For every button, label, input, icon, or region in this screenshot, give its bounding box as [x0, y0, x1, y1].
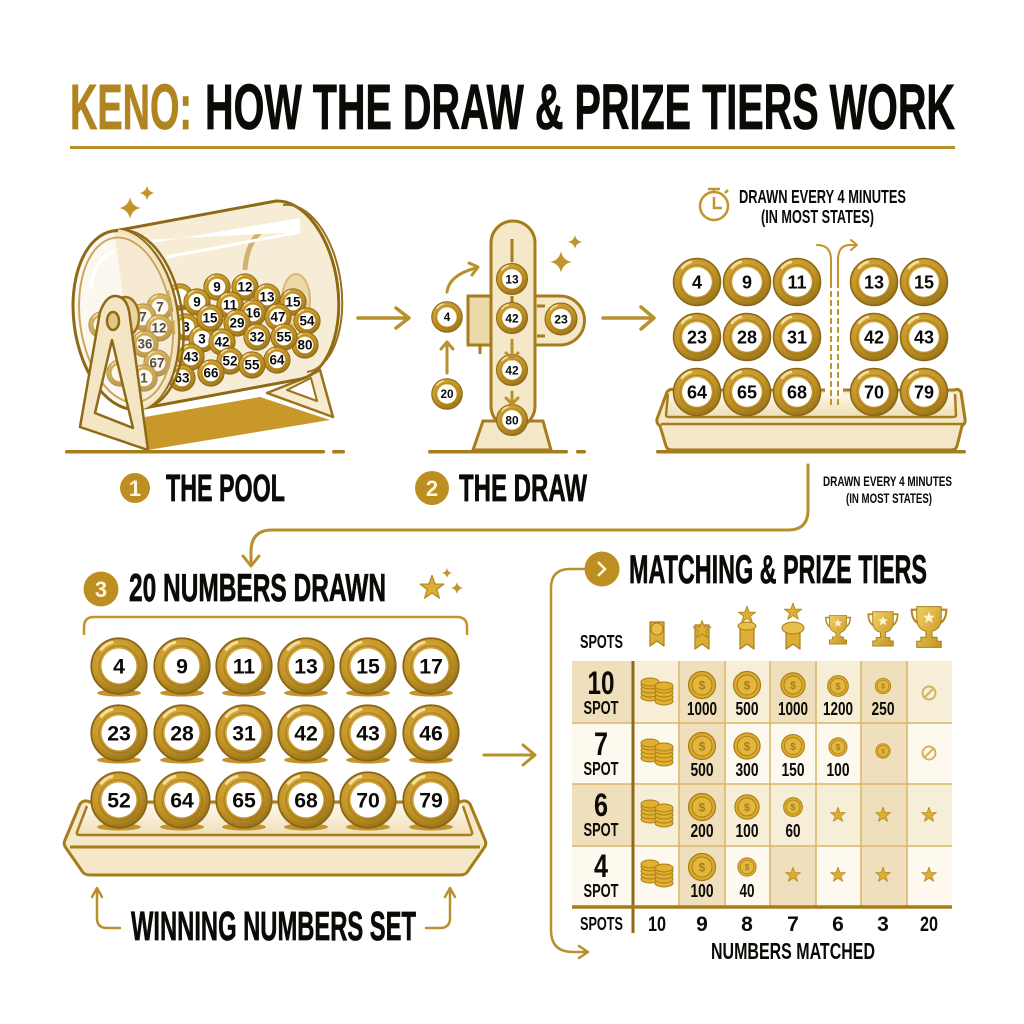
number balls: 13: [294, 655, 318, 679]
bottom axis: 20: [920, 913, 938, 936]
prize values: [687, 699, 894, 901]
winning balls: 11: [787, 272, 807, 292]
row labels: 7: [594, 726, 608, 762]
balls inside drum: 66: [204, 365, 218, 380]
tier icons: SPOTS: [580, 632, 623, 652]
tray: [64, 801, 486, 875]
balls inside drum: 64: [270, 352, 285, 367]
row labels: SPOT: [584, 698, 618, 718]
prize values: 250: [872, 699, 894, 719]
step label: the pool: THE POOL: [166, 468, 285, 510]
prize values: 100: [826, 760, 850, 780]
bottom axis: 3: [877, 913, 889, 936]
row labels: SPOT: [584, 820, 618, 840]
step label: the draw: 2: [426, 476, 438, 501]
note: draw frequency repeat: DRAWN EVERY 4 MINUTES: [823, 473, 952, 489]
ground shadow: [145, 397, 330, 450]
bottom axis: 6: [832, 913, 844, 936]
prize values: 1000: [778, 699, 808, 719]
bottom axis: 7: [787, 913, 799, 936]
arrow: connector to step 3: [243, 465, 808, 566]
number balls: 65: [232, 789, 256, 813]
right stand: [267, 370, 333, 417]
balls inside drum: 32: [250, 329, 264, 344]
winning balls: 4: [692, 272, 702, 292]
balls inside drum: 67: [150, 355, 164, 370]
number balls: 4: [113, 655, 125, 679]
step label: the pool: 1: [129, 476, 141, 501]
note: draw frequency repeat: [823, 473, 952, 506]
winning balls: 31: [787, 328, 807, 348]
coin stacks: [641, 678, 673, 887]
balls inside drum: 12: [152, 320, 166, 335]
number balls: 17: [419, 655, 443, 679]
bottom axis: 9: [696, 913, 708, 936]
heading: [84, 567, 386, 610]
balls inside drum: 63: [175, 370, 189, 385]
tier icons: [580, 603, 946, 652]
balls inside drum: 29: [230, 315, 244, 330]
balls inside drum: 43: [184, 349, 198, 364]
balls inside drum: [89, 274, 320, 391]
number balls: 70: [356, 789, 380, 813]
winning balls: 43: [914, 328, 934, 348]
step label: the draw: [415, 468, 587, 510]
winning balls: 64: [687, 382, 707, 402]
prize values: 300: [736, 760, 758, 780]
balls inside drum: 36: [138, 336, 152, 351]
bottom axis: 8: [741, 913, 753, 936]
panel: step 3 twenty numbers drawn: [64, 567, 486, 949]
no-prize marks: [922, 686, 936, 760]
number balls: 68: [294, 789, 318, 813]
balls in machine: 42: [505, 311, 519, 325]
panel: step 2 the draw: [415, 221, 587, 510]
balls inside drum: 15: [203, 310, 218, 325]
winning balls: 23: [687, 328, 707, 348]
balls in machine: 20: [440, 388, 454, 401]
arrow: numbers to prize table: [484, 745, 535, 765]
number balls: 79: [419, 789, 443, 813]
number balls: 28: [170, 722, 194, 746]
bottom axis: [580, 913, 938, 964]
prize values: 200: [690, 821, 714, 841]
ground line: [65, 450, 345, 454]
number balls: [91, 638, 459, 828]
drum front disc: [62, 224, 190, 416]
balls inside drum: 42: [215, 334, 229, 349]
note: draw frequency: [739, 186, 906, 227]
prize values: 100: [690, 881, 714, 901]
winning balls: 9: [742, 272, 752, 292]
balls inside drum: 52: [223, 353, 237, 368]
step label: the pool: [120, 468, 285, 510]
winning balls: 13: [864, 272, 884, 292]
number balls: 31: [232, 722, 256, 746]
row labels: [584, 665, 618, 901]
prize values: 40: [740, 881, 754, 901]
prize values: 60: [786, 821, 800, 841]
balls inside drum: 55: [245, 357, 260, 372]
balls inside drum: 54: [300, 313, 315, 328]
caption: WINNING NUMBERS SET: [131, 903, 416, 949]
row labels: SPOT: [584, 881, 618, 901]
row labels: 10: [588, 665, 614, 701]
row labels: 4: [594, 848, 608, 884]
icon: stars: [420, 568, 463, 598]
icon: stopwatch: [700, 189, 728, 220]
winning balls: 79: [914, 382, 934, 402]
balls in machine: 23: [554, 312, 568, 326]
balls in machine: 80: [505, 413, 519, 427]
arrow: pool to draw: [358, 308, 409, 328]
prize values: 1200: [823, 699, 853, 719]
bracket: [84, 617, 467, 635]
number balls: 15: [356, 655, 380, 679]
star marks: [786, 807, 936, 881]
balls inside drum: 80: [298, 337, 312, 352]
bottom axis: NUMBERS MATCHED: [711, 938, 875, 964]
heading: [584, 548, 927, 592]
winning balls: 70: [864, 382, 884, 402]
arrows around caption: [92, 888, 455, 928]
winning balls: 68: [787, 382, 807, 402]
bottom axis: SPOTS: [580, 914, 623, 934]
note: draw frequency repeat: (IN MOST STATES): [846, 490, 932, 506]
balls inside drum: 7: [156, 299, 164, 314]
row labels: SPOT: [584, 759, 618, 779]
winning balls: 65: [737, 382, 757, 402]
balls in machine: 4: [444, 311, 451, 324]
prize values: 500: [736, 699, 758, 719]
number balls: 23: [107, 722, 131, 746]
balls inside drum: 3: [198, 331, 206, 346]
icon: sparkles: [119, 186, 154, 219]
number balls: 11: [233, 655, 255, 679]
note: draw frequency: (IN MOST STATES): [761, 206, 874, 227]
flow arrows: [441, 263, 518, 404]
heading: 20 NUMBERS DRAWN: [129, 567, 386, 610]
drum body: [114, 201, 339, 409]
winning balls: 28: [737, 328, 757, 348]
prize coins: [688, 672, 891, 880]
balls in machine: [432, 263, 577, 436]
balls in machine: 42: [505, 363, 519, 377]
prize values: 500: [690, 760, 714, 780]
balls inside drum: 7: [139, 309, 147, 324]
winning balls: 15: [914, 272, 934, 292]
ground line: [428, 450, 586, 454]
balls inside drum: 47: [271, 309, 285, 324]
balls inside drum: 16: [246, 305, 260, 320]
right stand opening: [287, 378, 317, 401]
number balls: 46: [419, 722, 443, 746]
connector arrow: [551, 569, 588, 958]
shadows: [97, 690, 453, 830]
heading: 3: [95, 577, 107, 602]
winning balls: [674, 258, 948, 416]
icon: sparkles: [550, 235, 582, 273]
balls inside drum: 13: [260, 289, 274, 304]
number balls: 9: [176, 655, 188, 679]
bottom axis: 10: [648, 913, 666, 936]
row labels: 6: [594, 787, 608, 823]
machine housing: [468, 221, 584, 450]
balls inside drum: 15: [286, 294, 301, 309]
panel: drawn tray: [656, 186, 966, 454]
table cells: [572, 661, 952, 933]
panel: matching and prize tiers: [551, 548, 952, 964]
step label: the draw: THE DRAW: [459, 468, 587, 510]
prize values: 100: [736, 821, 758, 841]
balls inside drum: 9: [213, 279, 221, 294]
balls inside drum: 11: [223, 297, 238, 312]
left A-frame stand: [80, 296, 148, 450]
winning balls: 42: [864, 328, 884, 348]
note: draw frequency: DRAWN EVERY 4 MINUTES: [739, 186, 906, 207]
ground line: [656, 450, 966, 454]
balls inside drum: 1: [140, 370, 148, 385]
prize values: 150: [782, 760, 804, 780]
title: KENO:: [70, 71, 192, 143]
balls inside drum: 3: [182, 319, 190, 334]
number balls: 52: [107, 789, 131, 813]
arrow: draw to tray: [603, 307, 654, 329]
balls inside drum: 9: [193, 294, 201, 309]
balls in machine: 13: [505, 272, 519, 286]
prize values: 1000: [687, 699, 717, 719]
number balls: 43: [356, 722, 380, 746]
number balls: 64: [170, 789, 194, 813]
balls inside drum: 55: [277, 329, 292, 344]
divider arrows: [817, 240, 857, 405]
number balls: 42: [294, 722, 318, 746]
panel: step 1 the pool: [62, 186, 345, 510]
balls inside drum: 12: [238, 279, 252, 294]
tray: [657, 386, 965, 450]
